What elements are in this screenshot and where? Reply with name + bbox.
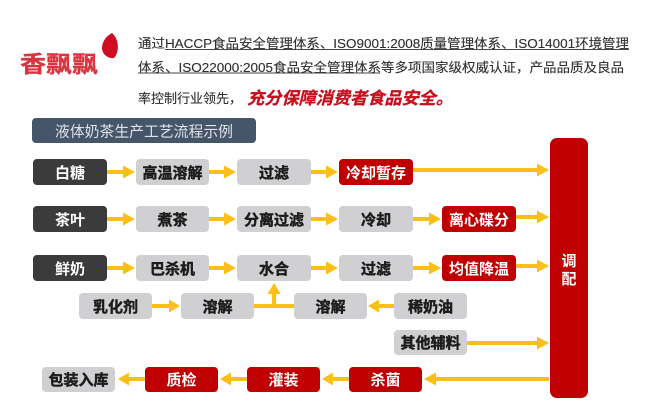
- row 3: fresh milk: [33, 255, 516, 281]
- heading bar: [32, 118, 256, 143]
- intro line 2: 体系、ISO22000:2005食品安全管理体系等多项国家级权威认证，产品品质及良品: [138, 59, 624, 75]
- step: 过滤: [237, 159, 311, 185]
- step: 茶叶: 茶叶: [55, 211, 85, 229]
- step: 溶解: [294, 293, 367, 319]
- row 2 arrows: [107, 210, 549, 226]
- step: 分离过滤: [237, 206, 311, 232]
- blending column: 调: [561, 253, 577, 270]
- step: 茶叶: [33, 206, 107, 232]
- row 4 arrows: [152, 283, 394, 312]
- row 2: tea: [33, 206, 516, 232]
- heading bar: 液体奶茶生产工艺流程示例: [55, 124, 233, 140]
- step: 鲜奶: [33, 255, 107, 281]
- step: 灌装: [247, 367, 320, 392]
- step: 杀菌: 杀菌: [370, 371, 401, 389]
- step: 乳化剂: [79, 293, 152, 319]
- step: 高温溶解: [136, 159, 209, 185]
- blending column: [550, 138, 588, 398]
- step: 白糖: [33, 159, 107, 185]
- intro line 1: 通过HACCP食品安全管理体系、ISO9001:2008质量管理体系、ISO14001环境管理: [138, 35, 629, 51]
- step: 煮茶: [136, 206, 209, 232]
- step: 过滤: [339, 255, 413, 281]
- step: 包装入库: 包装入库: [48, 371, 109, 389]
- icon: logo leaf: [102, 33, 118, 58]
- row 3 arrows: [107, 260, 549, 274]
- logo wordmark: 香飘飘: [20, 51, 98, 77]
- step: 离心碟分: 离心碟分: [449, 211, 509, 229]
- step: 其他辅料: 其他辅料: [400, 334, 461, 352]
- row 1 arrows: [107, 164, 549, 178]
- step: 溶解: 溶解: [202, 298, 233, 316]
- step: 稀奶油: [394, 293, 467, 319]
- step: 高温溶解: 高温溶解: [142, 164, 203, 182]
- step: 巴杀机: 巴杀机: [150, 260, 195, 278]
- bottom row: [42, 367, 422, 392]
- logo: [20, 33, 118, 77]
- row 1: sugar: [33, 159, 413, 185]
- row 4: additives: [79, 293, 467, 319]
- step: 包装入库: [42, 367, 115, 392]
- step: 过滤: 过滤: [361, 261, 391, 278]
- step: 质检: 质检: [166, 371, 197, 389]
- step: 冷却: [339, 206, 413, 232]
- step: 冷却暂存: [339, 159, 413, 185]
- step: 均值降温: [442, 255, 516, 281]
- intro line 3: 率控制行业领先，: [138, 90, 242, 106]
- step: 均值降温: 均值降温: [449, 260, 509, 278]
- intro text block: [138, 35, 629, 108]
- step: 离心碟分: [442, 206, 516, 232]
- step: 巴杀机: [136, 255, 209, 281]
- step: 水合: [237, 255, 311, 281]
- step: 稀奶油: 稀奶油: [408, 298, 453, 316]
- other ingredients arrow: [467, 336, 549, 350]
- highlight sentence: 充分保障消费者食品安全。: [247, 89, 453, 108]
- step: 煮茶: 煮茶: [157, 211, 188, 229]
- step: 灌装: 灌装: [268, 372, 299, 389]
- step: 杀菌: [349, 367, 422, 392]
- arrows: [107, 164, 549, 386]
- step: 分离过滤: 分离过滤: [244, 211, 304, 229]
- step: 其他辅料: [394, 330, 467, 355]
- step: 溶解: [181, 293, 254, 319]
- step: 溶解: 溶解: [315, 298, 346, 316]
- step: 水合: 水合: [259, 260, 289, 278]
- step: 白糖: 白糖: [55, 164, 85, 182]
- step: 鲜奶: 鲜奶: [55, 260, 85, 278]
- step: 冷却暂存: 冷却暂存: [346, 164, 406, 182]
- step: 过滤: 过滤: [259, 165, 289, 182]
- blending column: 配: [561, 271, 577, 288]
- step: 乳化剂: 乳化剂: [93, 298, 138, 316]
- bottom row arrows: [118, 372, 549, 386]
- step: 冷却: 冷却: [361, 211, 391, 229]
- step: 质检: [145, 367, 218, 392]
